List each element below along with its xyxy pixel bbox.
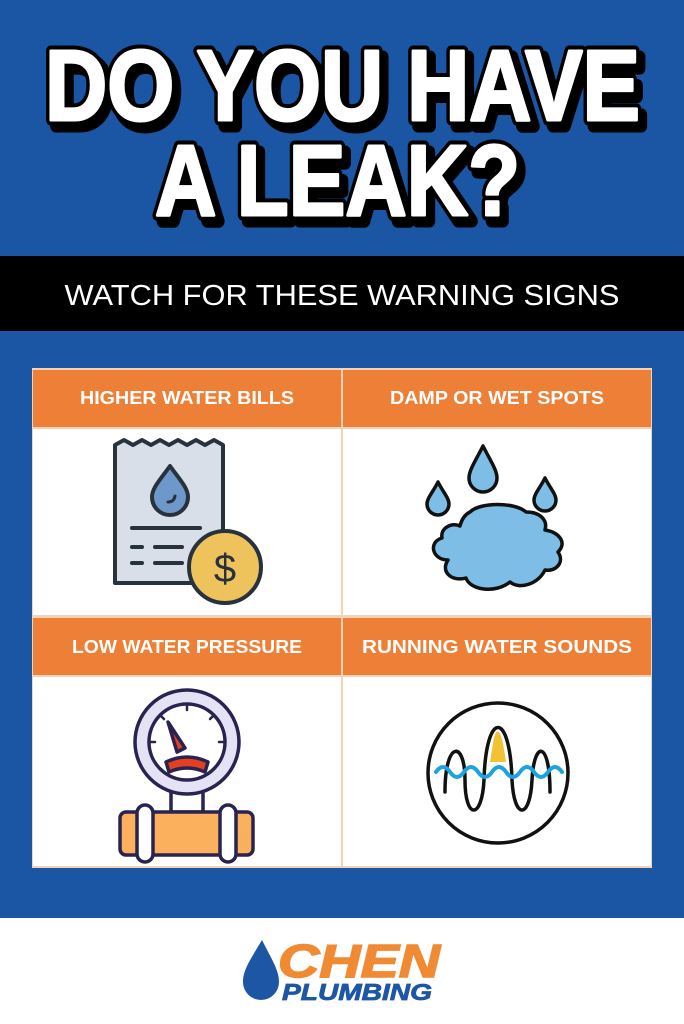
title [45, 30, 645, 243]
title: A LEAK? [155, 125, 520, 237]
icon: sound waves [428, 703, 568, 843]
panel: damp or wet spots: DAMP OR WET SPOTS [390, 388, 604, 408]
icon: logo drop [243, 940, 279, 1000]
panel: higher water bills: HIGHER WATER BILLS [80, 388, 294, 408]
panel: low water pressure: LOW WATER PRESSURE [72, 637, 302, 657]
logo [243, 935, 441, 1005]
title: A LEAK? [155, 125, 520, 237]
logo: PLUMBING [282, 979, 432, 1005]
subtitle band [0, 256, 684, 331]
panel: low water pressure [33, 618, 341, 866]
icon: puddle and drops [427, 446, 562, 589]
title: A LEAK? [160, 131, 525, 243]
grid panel [32, 368, 652, 868]
panel: running water sounds: RUNNING WATER SOUNDS [362, 637, 632, 657]
footer [0, 918, 684, 1024]
subtitle band: WATCH FOR THESE WARNING SIGNS [64, 280, 620, 312]
panel: higher water bills [33, 370, 341, 615]
panel: running water sounds [343, 618, 651, 866]
icon: water bill [115, 440, 261, 603]
icon: pressure gauge [120, 690, 253, 862]
icon: water bill: $ [214, 547, 236, 591]
panel: damp or wet spots [343, 370, 651, 615]
logo: CHEN [278, 935, 441, 987]
